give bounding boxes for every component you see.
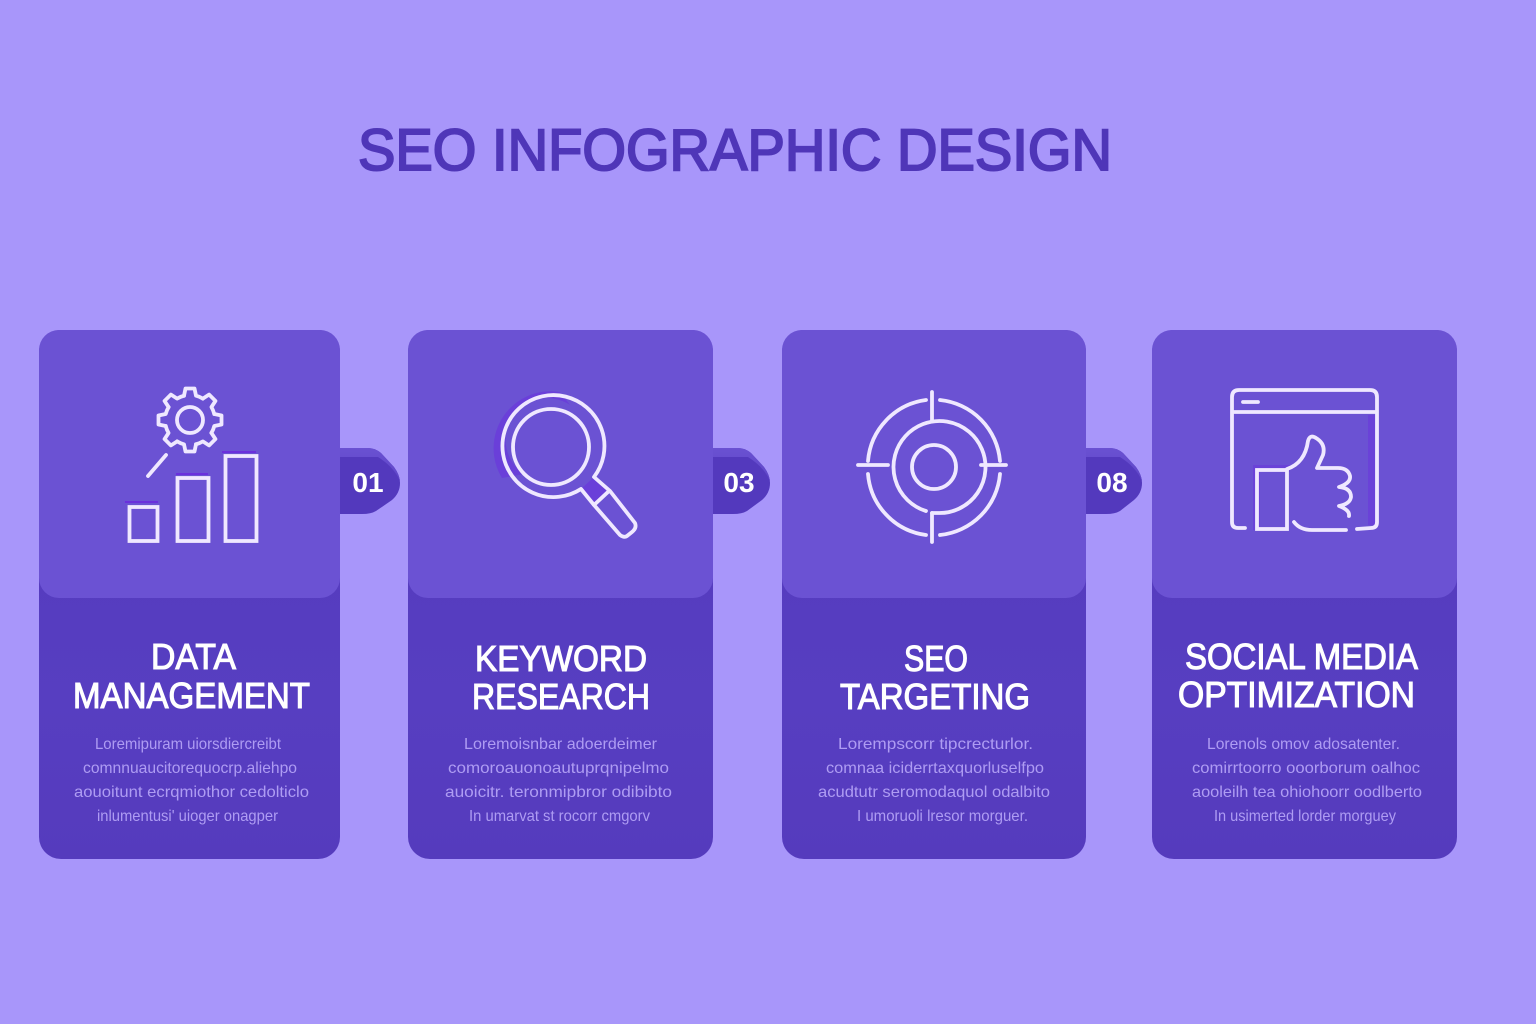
heading — [1178, 636, 1418, 715]
heading: SOCIAL MEDIA — [1185, 636, 1418, 677]
text block: Lorempscorr tipcrecturlor. — [838, 736, 1033, 753]
heading — [73, 636, 310, 716]
text block: Loremipuram uiorsdiercreibt — [95, 736, 282, 753]
text block: comirrtoorro ooorborum oalhoc — [1192, 760, 1420, 777]
card top — [39, 330, 340, 598]
card body — [39, 330, 340, 859]
text block: In usimerted lorder morguey — [1214, 808, 1396, 825]
icon: gear and bar chart — [125, 388, 256, 541]
heading: KEYWORD — [475, 638, 647, 679]
text block: comnaa iciderrtaxquorluselfpo — [826, 760, 1044, 777]
card body — [408, 330, 713, 859]
card body — [782, 330, 1086, 859]
arrow tab 08: 08 — [1096, 467, 1128, 498]
arrow tab 03 — [713, 448, 770, 514]
text block: inlumentusi' uioger onagper — [97, 808, 279, 825]
text block: I umoruoli lresor morguer. — [857, 808, 1028, 825]
heading: MANAGEMENT — [73, 675, 310, 716]
heading — [472, 638, 650, 717]
card top — [782, 330, 1086, 598]
icon: target — [858, 392, 1006, 542]
heading: SEO — [904, 638, 968, 679]
text block: aouoitunt ecrqmiothor cedolticlo — [74, 784, 309, 801]
title: SEO INFOGRAPHIC DESIGN — [358, 118, 1112, 183]
icon: magnifying glass — [494, 391, 636, 537]
heading: OPTIMIZATION — [1178, 674, 1415, 715]
text block — [445, 736, 672, 825]
text block: In umarvat st rocorr cmgorv — [469, 808, 650, 825]
text block — [74, 736, 309, 825]
icon: browser window with thumbs up — [1232, 390, 1377, 530]
arrow tab 03: 03 — [723, 467, 755, 498]
heading — [840, 638, 1030, 717]
text block — [1192, 736, 1422, 825]
card top — [408, 330, 713, 598]
panel: social media optimization — [1152, 330, 1457, 859]
text block: Lorenols omov adosatenter. — [1207, 736, 1400, 753]
text block: Loremoisnbar adoerdeimer — [464, 736, 658, 753]
panel: data management — [39, 330, 340, 859]
text block: comoroauonoautuprqnipelmo — [448, 760, 669, 777]
text block: auoicitr. teronmipbror odibibto — [445, 784, 672, 801]
text block — [818, 736, 1050, 825]
text block: comnnuaucitorequocrp.aliehpo — [83, 760, 297, 777]
heading: DATA — [151, 636, 236, 677]
heading: TARGETING — [840, 676, 1030, 717]
text block: acudtutr seromodaquol odalbito — [818, 784, 1050, 801]
arrow tab 01 — [340, 448, 400, 514]
arrow tab 08 — [1086, 448, 1142, 514]
panel: keyword research — [408, 330, 713, 859]
arrow tab 01: 01 — [352, 467, 384, 498]
card body — [1152, 330, 1457, 859]
text block: aooleilh tea ohiohoorr oodlberto — [1192, 784, 1422, 801]
card top — [1152, 330, 1457, 598]
panel: seo targeting — [782, 330, 1086, 859]
heading: RESEARCH — [472, 676, 650, 717]
